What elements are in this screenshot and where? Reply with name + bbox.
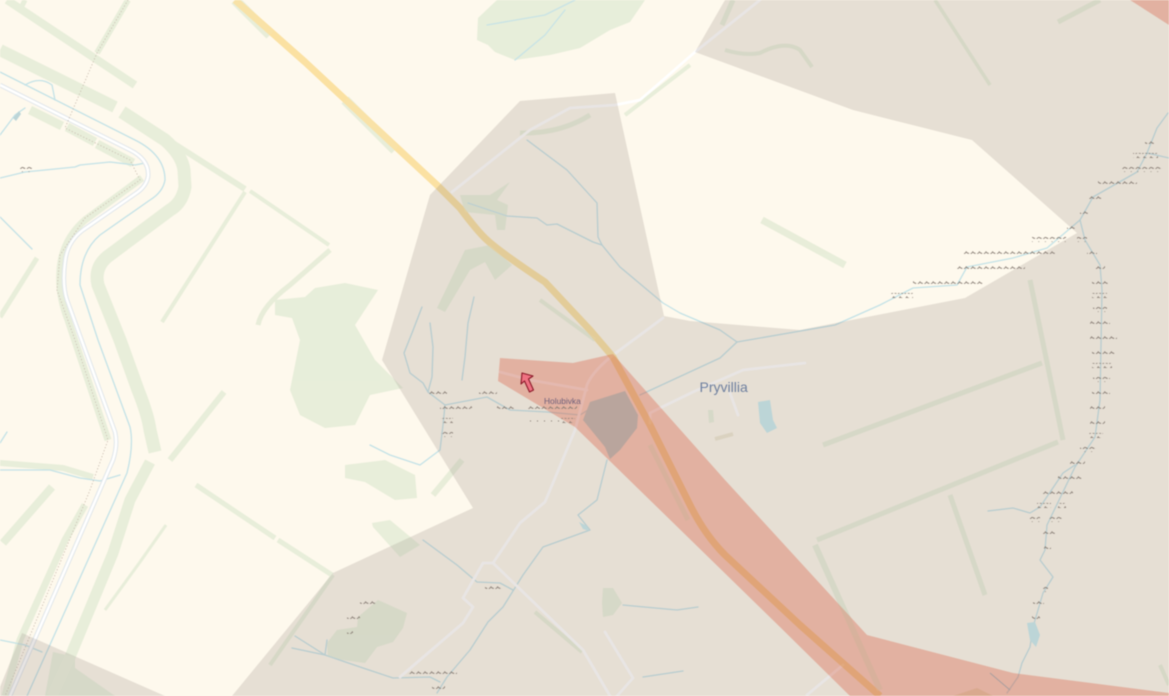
brown patch at bottom edge xyxy=(953,688,993,696)
sparse marsh dots xyxy=(530,420,559,422)
main highway xyxy=(235,0,880,696)
settlement: Holubivka built-up area xyxy=(583,391,638,459)
patches lightened above overlays xyxy=(45,0,714,696)
marsh row near Holubivka xyxy=(560,418,575,423)
local roads xyxy=(400,0,843,696)
grey line near bottom xyxy=(990,673,1010,690)
roads lightened above overlays xyxy=(400,0,843,696)
label: Holubivka: Holubivka xyxy=(544,396,581,406)
marsh symbols xyxy=(20,139,1162,690)
dotted boundary line xyxy=(5,0,140,696)
small brown patch xyxy=(715,434,733,439)
lakes xyxy=(13,111,1040,647)
green forest patches xyxy=(45,0,714,696)
highway on the left xyxy=(0,85,148,696)
icon: red advance arrow xyxy=(521,373,534,392)
label: Pryvillia: Pryvillia xyxy=(700,379,748,395)
advance zone overlay xyxy=(498,0,1169,696)
